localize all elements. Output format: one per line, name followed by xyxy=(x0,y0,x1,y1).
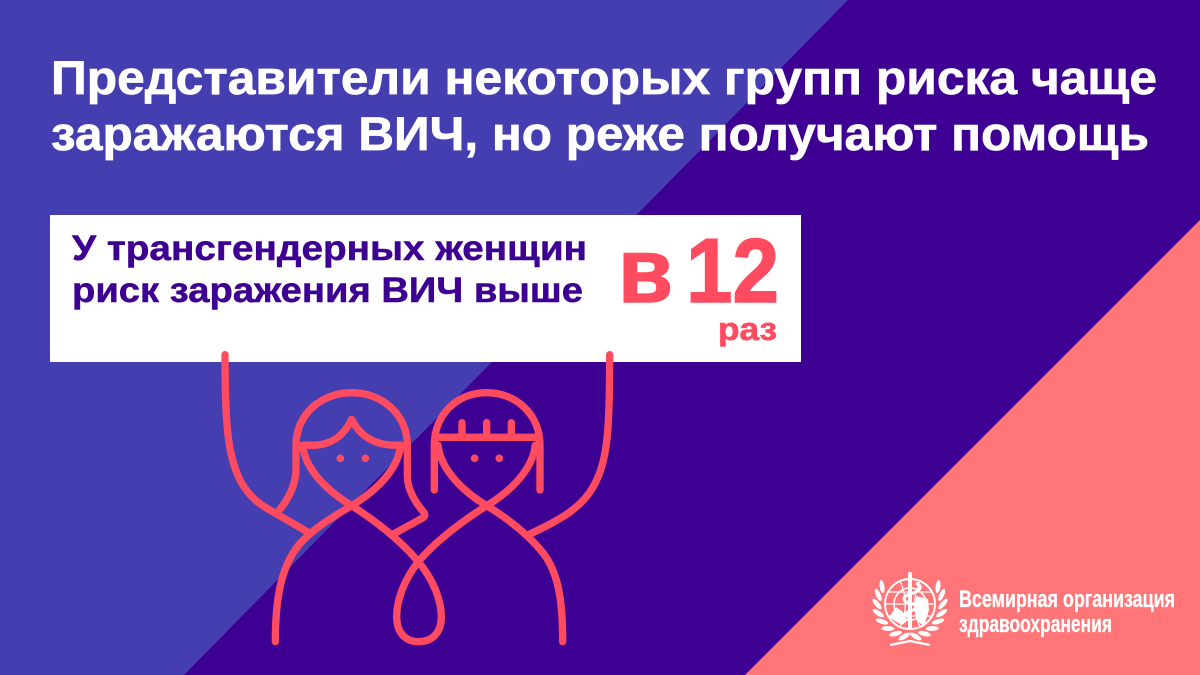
shared loop xyxy=(352,445,487,642)
right arm xyxy=(530,355,610,534)
unit label: раз xyxy=(718,311,777,347)
panel: statistic placard xyxy=(50,215,801,362)
placard text xyxy=(72,229,587,310)
organization name: здравоохранения xyxy=(959,611,1112,638)
title: заражаются ВИЧ, но реже получают помощь xyxy=(51,107,1149,160)
left arm xyxy=(225,355,310,533)
emblem xyxy=(871,574,949,645)
left face and body xyxy=(275,445,352,642)
big number: 12 xyxy=(686,221,779,322)
organization name xyxy=(959,586,1175,638)
title: Представители некоторых групп риска чаще xyxy=(51,51,1157,104)
laurel wreath left xyxy=(871,580,911,642)
title xyxy=(51,51,1157,160)
eyes xyxy=(336,454,503,462)
placard text: риск заражения ВИЧ выше xyxy=(72,271,583,310)
logo: World Health Organization xyxy=(871,574,1175,645)
right woman fringe xyxy=(437,423,537,437)
right woman hair xyxy=(434,393,540,490)
illustration: two women holding the placard xyxy=(225,355,610,642)
right face and body xyxy=(487,445,563,642)
left woman hair xyxy=(277,393,425,534)
placard text: У трансгендерных женщин xyxy=(72,229,587,268)
left woman fringe xyxy=(306,419,400,445)
big number: в xyxy=(618,220,673,322)
laurel wreath right xyxy=(909,580,949,642)
big number xyxy=(618,220,779,322)
